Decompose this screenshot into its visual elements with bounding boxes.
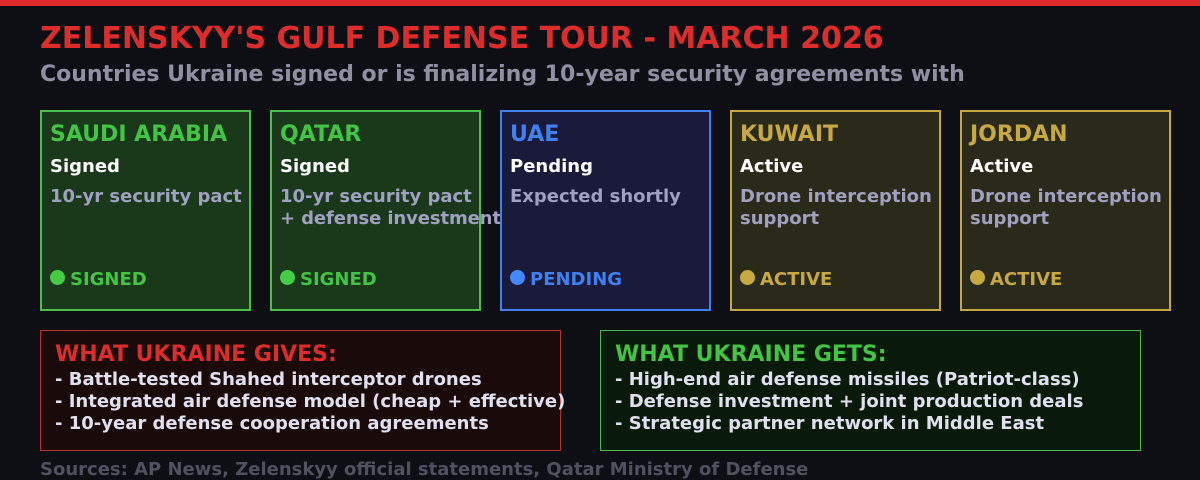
sources footnote: Sources: AP News, Zelenskyy official statements, Qatar Ministry of Defense [40,459,808,480]
panel: Jordan: JORDAN [968,122,1068,147]
panel: Jordan: support [970,208,1050,229]
panel: UAE: UAE [510,122,559,147]
panel: what Ukraine gets: - Strategic partner network in Middle East [615,413,1044,434]
panel: Kuwait: KUWAIT [740,122,838,147]
panel: UAE: Pending [510,156,593,177]
panel: Kuwait [731,111,940,310]
panel: what Ukraine gets: - Defense investment + joint production deals [615,391,1083,412]
panel: Saudi Arabia [41,111,250,310]
panel: Jordan: Drone interception [970,186,1162,207]
panel: what Ukraine gives [40,330,565,450]
panel: Qatar: + defense investment [280,208,501,229]
panel: Qatar [271,111,501,310]
panel: Saudi Arabia: SIGNED [70,269,147,290]
panel: UAE [501,111,710,310]
panel: what Ukraine gives: - Integrated air defense model (cheap + effective) [55,391,565,412]
panel: Saudi Arabia: SAUDI ARABIA [50,122,227,147]
panel: what Ukraine gets [600,330,1140,450]
panel: what Ukraine gives: WHAT UKRAINE GIVES: [55,342,337,367]
panel: Jordan [961,111,1170,310]
top accent bar [0,0,1200,6]
panel: Saudi Arabia: 10-yr security pact [50,186,242,207]
panel: Qatar: Signed [280,156,350,177]
panel: Kuwait: Active [740,156,803,177]
panel: UAE: PENDING [530,269,622,290]
panel: Kuwait: Drone interception [740,186,932,207]
subtitle: Countries Ukraine signed or is finalizing 10-year security agreements with [40,62,965,87]
panel: Kuwait: ACTIVE [760,269,832,290]
panel: what Ukraine gives: - Battle-tested Shahed interceptor drones [55,369,482,390]
panel: what Ukraine gets: - High-end air defense missiles (Patriot-class) [615,369,1080,390]
panel: Qatar: SIGNED [300,269,377,290]
panel: Jordan: Active [970,156,1033,177]
panel: what Ukraine gives: - 10-year defense cooperation agreements [55,413,489,434]
panel: Kuwait: support [740,208,820,229]
panel: what Ukraine gets: WHAT UKRAINE GETS: [615,342,887,367]
panel: UAE: Expected shortly [510,186,681,207]
panel: Saudi Arabia: Signed [50,156,120,177]
title: ZELENSKYY'S GULF DEFENSE TOUR - MARCH 2026 [40,21,884,56]
panel: Qatar: 10-yr security pact [280,186,472,207]
panel: Jordan: ACTIVE [990,269,1062,290]
panel: Qatar: QATAR [280,122,361,147]
